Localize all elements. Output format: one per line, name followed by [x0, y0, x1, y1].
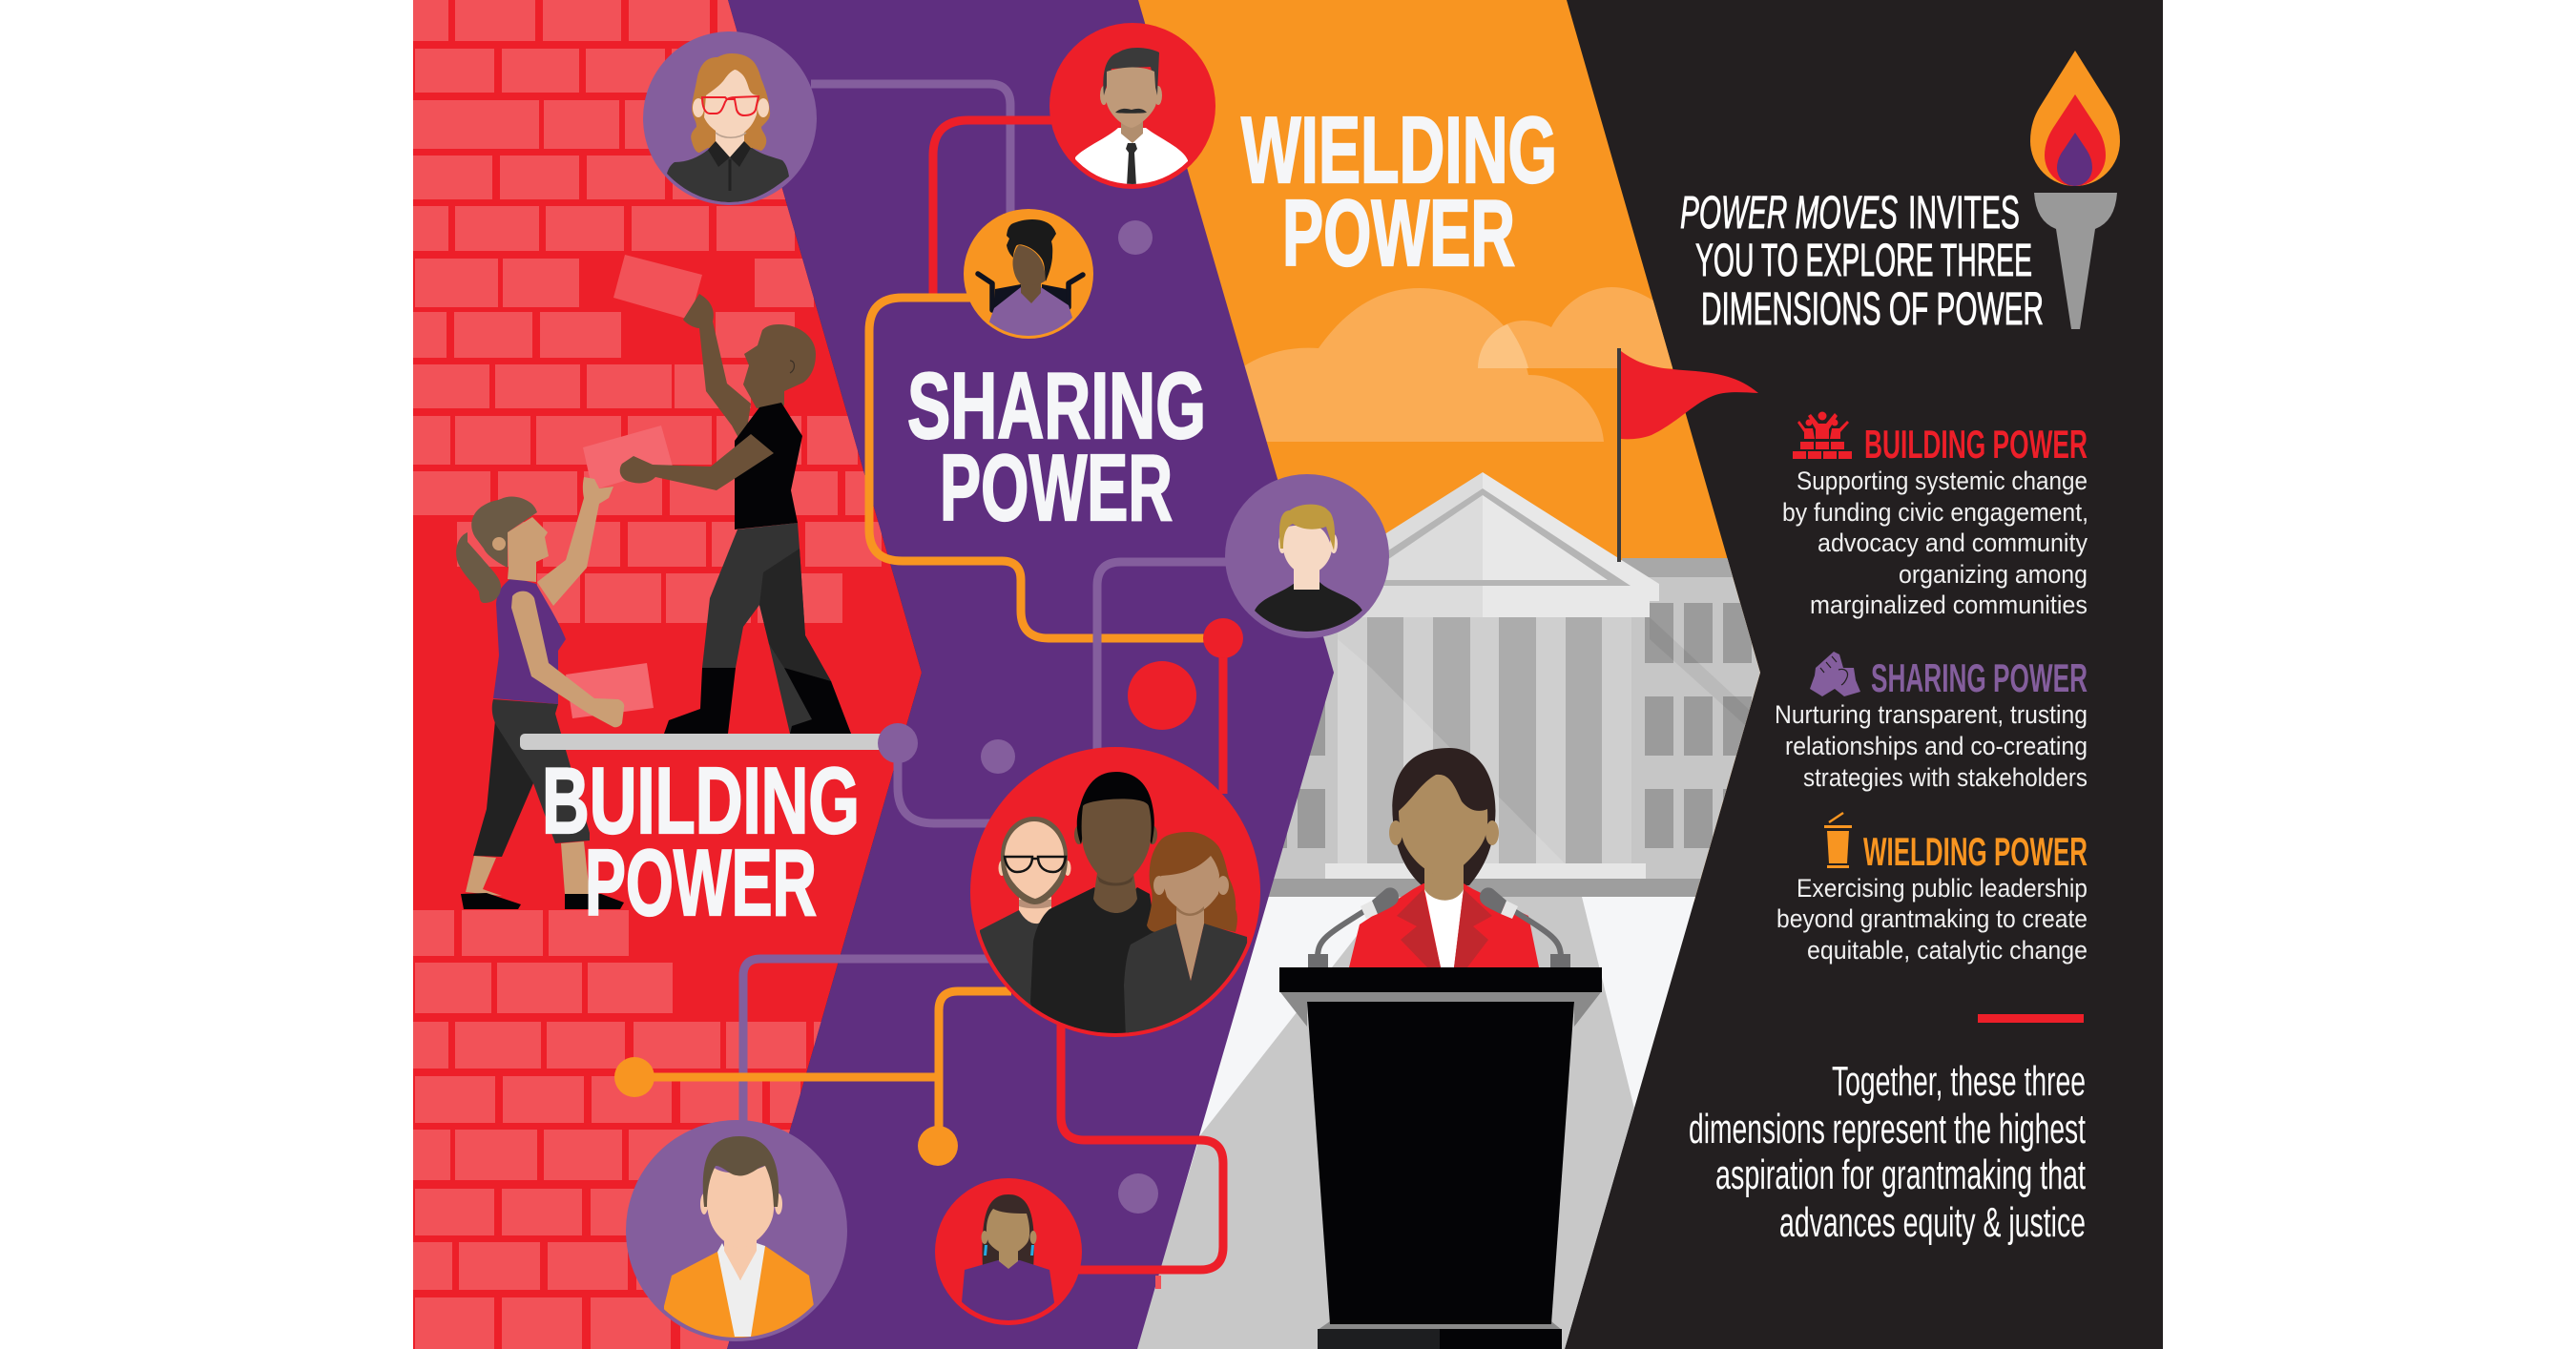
heading: sharing power: POWER: [940, 435, 1173, 540]
legend text: building power: [1782, 467, 2088, 619]
legend text: building power: Supporting systemic change: [1797, 467, 2088, 495]
closing text: aspiration for grantmaking that: [1715, 1152, 2086, 1198]
portrait: woman with red glasses: [643, 31, 817, 205]
intro text: POWER MOVES: [1680, 188, 1898, 239]
floor: [1137, 897, 1695, 1349]
clouds: [1231, 287, 1679, 442]
icon: clasped hands: [1810, 652, 1860, 696]
red rule: [1978, 1014, 2084, 1023]
heading: wielding power: POWER: [1282, 180, 1515, 285]
portrait: blond man: [1225, 474, 1389, 638]
heading: sharing power: SHARING: [907, 353, 1206, 458]
closing text: dimensions represent the highest: [1689, 1106, 2086, 1152]
legend heading: building power: BUILDING POWER: [1864, 422, 2088, 467]
portrait: woman in wheelchair: [964, 209, 1093, 343]
legend text: wielding power: Exercising public leadership: [1797, 874, 2088, 903]
heading: wielding power: WIELDING: [1241, 97, 1557, 202]
building: [1269, 472, 1760, 897]
legend text: sharing power: Nurturing transparent, trusting: [1775, 700, 2088, 729]
closing text: Together, these three: [1832, 1058, 2086, 1105]
connector lines: [634, 84, 1231, 1270]
legend heading: wielding power: WIELDING POWER: [1863, 829, 2088, 874]
flag: [1617, 348, 1758, 562]
panel: sharing power purple section: [727, 0, 1334, 1349]
heading: building power: POWER: [585, 830, 817, 935]
legend text: sharing power: [1775, 700, 2088, 792]
intro text: [1680, 188, 2044, 335]
icon: podium: [1824, 813, 1852, 868]
loose brick: top: [613, 255, 702, 320]
legend text: building power: by funding civic engagement,: [1782, 498, 2088, 527]
pink brick fragment: [1155, 1276, 1161, 1289]
legend text: building power: advocacy and community: [1818, 529, 2088, 557]
closing text: advances equity & justice: [1779, 1199, 2086, 1246]
legend text: sharing power: strategies with stakeholders: [1803, 763, 2088, 792]
panel: wielding power scene: [1135, 0, 1765, 1349]
connector nodes: [614, 220, 1243, 1214]
portrait: woman with earrings: [935, 1178, 1082, 1326]
microphones: [1308, 887, 1570, 967]
icon: people on bricks: [1793, 412, 1852, 459]
panel: building power red section: [413, 0, 928, 1349]
icon: torch: [2030, 51, 2120, 329]
legend text: building power: organizing among: [1899, 560, 2088, 589]
legend text: sharing power: relationships and co-creating: [1785, 732, 2088, 760]
heading: building power: BUILDING: [542, 748, 860, 853]
heading: wielding power: [1241, 97, 1557, 285]
heading: sharing power: [907, 353, 1206, 540]
shelf: [520, 734, 887, 750]
intro text: YOU TO EXPLORE THREE: [1695, 236, 2032, 286]
intro text: DIMENSIONS OF POWER: [1701, 284, 2044, 335]
legend text: wielding power: [1776, 874, 2088, 965]
loose brick: passed between figures: [583, 425, 673, 490]
podium: [1279, 967, 1602, 1349]
portrait: man in orange jacket: [626, 1120, 847, 1345]
figure: woman building: [456, 477, 654, 909]
loose brick: held: [566, 663, 654, 718]
legend text: building power: marginalized communities: [1810, 591, 2088, 619]
portrait: man with tie: [1049, 23, 1215, 191]
legend heading: sharing power: SHARING POWER: [1871, 655, 2088, 700]
panel: dark background: [413, 0, 2163, 1349]
intro text: INVITES: [1908, 188, 2020, 239]
figure: man building: [620, 294, 851, 734]
closing text: [1689, 1058, 2086, 1246]
legend text: wielding power: beyond grantmaking to create: [1776, 904, 2088, 933]
brick wall: [413, 0, 882, 1349]
portrait: group of three: [970, 747, 1260, 1040]
figure: woman speaking at podium: [1349, 748, 1539, 967]
heading: building power: [542, 748, 860, 935]
legend text: wielding power: equitable, catalytic change: [1807, 936, 2088, 965]
